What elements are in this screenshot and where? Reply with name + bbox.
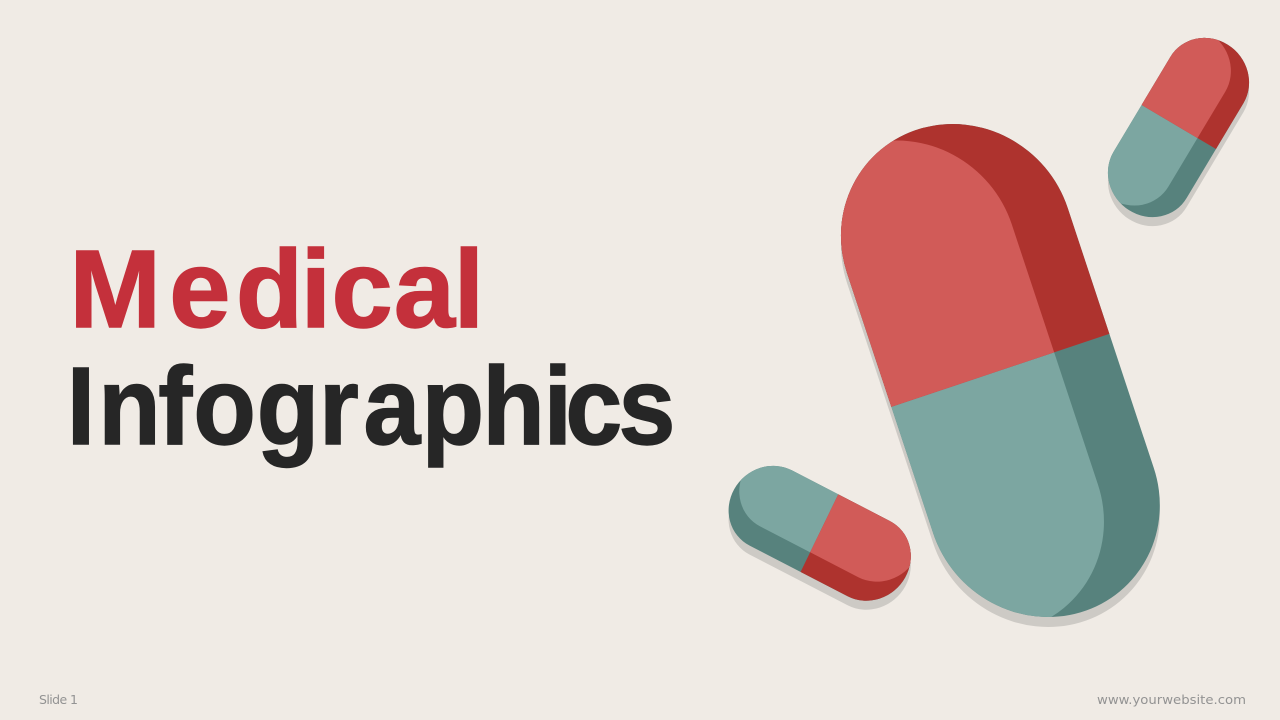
- teal half: [728, 466, 911, 601]
- capsule shadow: [713, 460, 926, 624]
- red half: [800, 494, 911, 601]
- footer: slide number: Slide 1: [39, 692, 78, 707]
- icon: large capsule: [840, 124, 1160, 627]
- title: [67, 228, 675, 468]
- red half: [1142, 38, 1250, 149]
- capsule shadow: [1093, 31, 1264, 242]
- icon: top-right capsule: [1108, 38, 1250, 226]
- title line: Medical: Medical: [69, 228, 484, 351]
- teal half: [840, 124, 1160, 617]
- footer: website: www.yourwebsite.com: [1097, 692, 1246, 707]
- capsule shadow: [810, 106, 1191, 655]
- red half: [840, 124, 1110, 407]
- icon: bottom-left capsule: [728, 466, 911, 610]
- teal half: [1108, 38, 1250, 218]
- title line: Infographics: Infographics: [67, 345, 675, 468]
